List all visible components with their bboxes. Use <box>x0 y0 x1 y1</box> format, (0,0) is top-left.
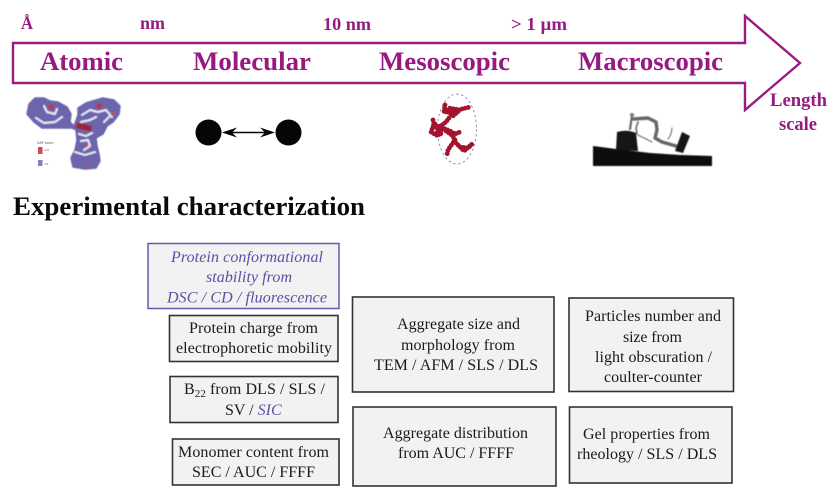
label: atomic: Atomic <box>40 46 123 76</box>
right block <box>675 132 690 153</box>
panel: aggregate size: Aggregate size and <box>397 316 520 333</box>
panel: monomer content: SEC / AUC / FFFF <box>192 464 315 481</box>
panel: gel properties: Gel properties from <box>583 426 711 443</box>
panel: protein charge: electrophoretic mobility <box>176 340 332 357</box>
panel: B22 <box>170 376 338 422</box>
panel: conformational stability: stability from <box>206 269 292 286</box>
length scale arrow <box>13 16 800 110</box>
icon: two molecules with interaction arrow <box>196 120 302 146</box>
icon legend: SAP score: -0.5 <box>44 163 49 166</box>
icon legend: SAP score: +0.5 <box>44 149 50 152</box>
icon: protein aggregate cluster in dashed ellipse <box>431 94 476 164</box>
gel base <box>593 146 712 166</box>
tick: 10 nm: 10 nm <box>323 14 371 34</box>
axis label: length scale: Length <box>770 91 828 111</box>
heading: experimental characterization: Experimental characterization <box>13 191 365 221</box>
label: mesoscopic: Mesoscopic <box>379 46 510 76</box>
panel: gel properties <box>570 407 732 483</box>
label: molecular: Molecular <box>193 46 311 76</box>
tick: greater than 1 micrometre: > 1 µm <box>511 14 567 34</box>
icon: antibody surface <box>27 98 120 169</box>
panel: monomer content: Monomer content from <box>178 444 330 461</box>
panel: aggregate distribution <box>353 407 556 486</box>
panel: aggregate distribution: from AUC / FFFF <box>398 445 514 462</box>
panel: B22: 22 <box>195 388 206 400</box>
panel: gel properties: rheology / SLS / DLS <box>577 446 717 463</box>
gel strands <box>630 113 676 146</box>
tick: angstrom: Å <box>21 13 33 33</box>
panel: aggregate size: TEM / AFM / SLS / DLS <box>374 357 538 374</box>
label: macroscopic: Macroscopic <box>578 46 723 76</box>
left cylinder <box>616 131 638 151</box>
icon: gel photograph <box>593 113 712 166</box>
scale tick labels <box>21 13 567 34</box>
axis label: length scale: scale <box>779 115 817 135</box>
scale level labels <box>40 46 723 76</box>
panel: B22: SV / SIC <box>225 402 282 419</box>
axis label: length scale <box>770 91 828 135</box>
icon legend: SAP score: SAP score <box>37 141 54 145</box>
panel: aggregate distribution: Aggregate distribution <box>383 425 528 442</box>
tick: nm: nm <box>140 13 165 33</box>
panel: protein charge: Protein charge from <box>189 320 319 337</box>
panel: B22: B <box>184 381 195 398</box>
panel: B22: from DLS / SLS / <box>206 381 326 398</box>
panel: conformational stability: Protein conformational <box>170 249 324 266</box>
panel: particles: coulter-counter <box>604 369 703 386</box>
icon legend: SAP score <box>37 141 54 166</box>
panel: protein charge <box>170 316 338 362</box>
panel: conformational stability: DSC / CD / fluorescence <box>166 290 327 306</box>
panel: particles: size from <box>623 329 683 346</box>
panel: conformational stability <box>148 244 339 308</box>
panel: particles: light obscuration / <box>595 349 713 366</box>
panel: monomer content <box>172 439 339 485</box>
panel: particles <box>569 298 734 392</box>
panel: aggregate size: morphology from <box>401 337 516 354</box>
panel: particles: Particles number and <box>585 308 721 325</box>
panel: aggregate size <box>352 297 554 392</box>
